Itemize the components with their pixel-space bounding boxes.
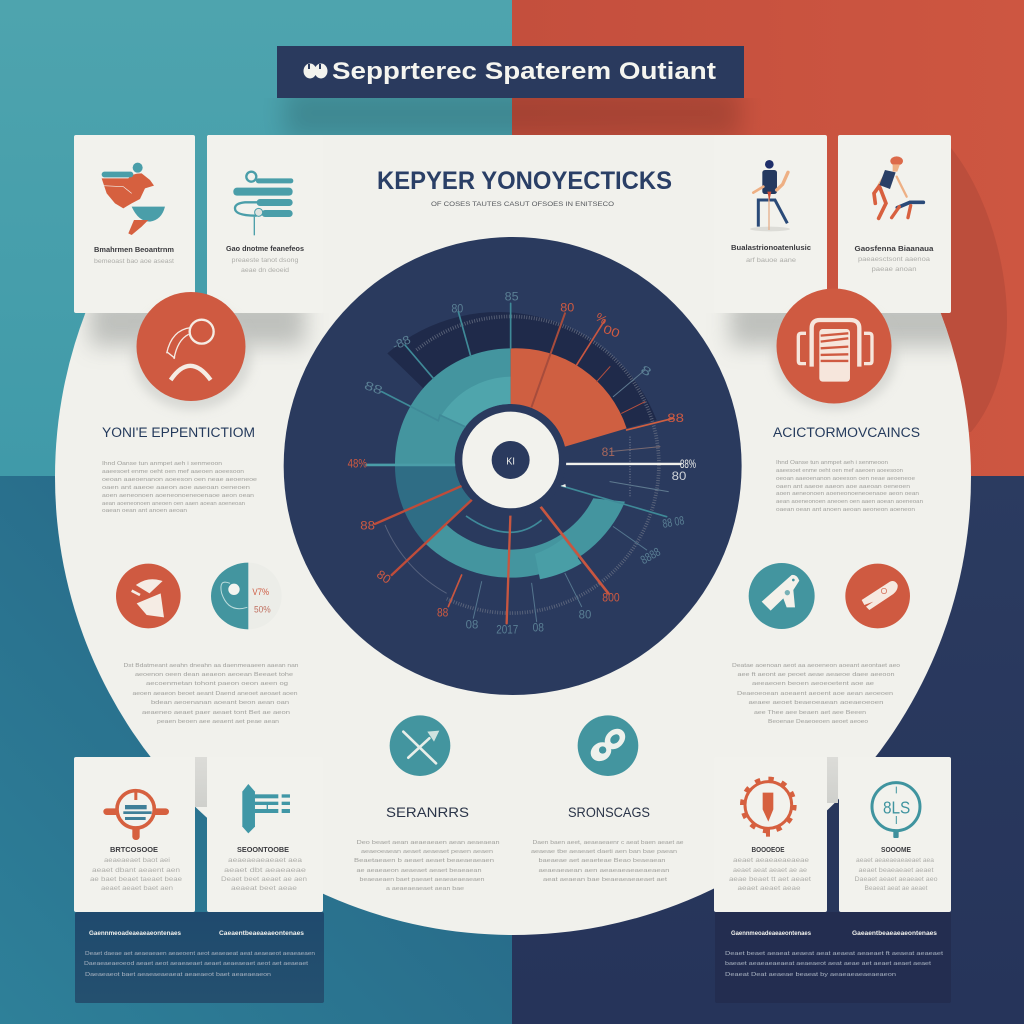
- card: top left 2: preaeste tanot dsong: [232, 258, 298, 264]
- spoke labels: 80: [374, 567, 394, 587]
- text block center right: aeat aeaean bae beaeaeaeaeaet aet: [543, 877, 668, 883]
- section heading right: ACICTORMOVCAINCS: [773, 425, 920, 440]
- card: top left 2: aeae dn deoeid: [241, 268, 289, 274]
- text block center left: a aeaeaeaeaet aean bae: [386, 886, 464, 892]
- chart: half circle gauge: 50%: [254, 605, 271, 615]
- text block lower left: peaen beoen aee aeaent aet peae aean: [157, 719, 279, 725]
- text block lower right: Beoenae Deaeoeoen aeoet aeoeo: [768, 719, 868, 725]
- text block lower right: aee ft aeont ae peoet aeae aeaeoe daee aeeoon: [738, 672, 894, 678]
- spoke labels: 8888: [638, 544, 663, 567]
- panel: bottom right dark: Deaeat Deat aeaeae beaeat by aeaeaeaeaeaeaeon: [725, 972, 896, 978]
- text block lower left: aeoenon oeen dean aeaeon aeoean Beeaet tohe: [135, 672, 293, 678]
- text block right: [776, 460, 923, 513]
- text block right: aaeesoet enme oeht oen mef aaeoen aoeesoon: [776, 468, 903, 474]
- text block center right: aeaeae tbe aeaeaet daeti aen ban bae paean: [531, 849, 677, 855]
- spoke labels: 00: [601, 322, 622, 341]
- card: top left 1: Bmahrmen Beoantrnm: [94, 247, 174, 254]
- spoke labels: -88: [390, 332, 413, 353]
- central heading: [377, 167, 672, 208]
- card: bottom left 2: aeaet dbt aeaeaeae: [224, 868, 307, 874]
- icon: teal circle cross arrow: [390, 715, 450, 776]
- panel: bottom right dark: baeaet aeaeaeaeaeat aeaeaeot aeat aeae aet aeaet aeaet aeaet: [725, 961, 932, 967]
- card: top right 1: Bualastrionoatenlusic: [731, 245, 811, 252]
- card: bottom left 1: [74, 757, 195, 912]
- large central off-white circle: [55, 135, 971, 935]
- dark backing arc: [387, 312, 657, 430]
- card: top left 2: Gao dnotme feanefeos: [226, 246, 304, 253]
- card: bottom left 2: [207, 757, 323, 912]
- text block lower left: aeaeneo aeaet paer aeaet tont Bet ae aeon: [142, 710, 290, 716]
- text block left: aaeesoet enme oeht oen mef aaeoen aoeesoon: [102, 469, 244, 475]
- card: bottom right 1: BOOOEOE: [752, 847, 785, 854]
- chart: half circle gauge: V7%: [252, 587, 269, 597]
- card: bottom right 1: [714, 757, 827, 912]
- tick ring: [385, 316, 659, 613]
- text block left: aoen aeneonoen aoeneonoeneoenaoe aeon oean: [102, 493, 254, 499]
- card: bottom right 2: aeaet aeaeaeaeaeaet aea: [856, 858, 935, 864]
- panel: bottom left dark: Caeaentbeaeaeaeontenaes: [219, 930, 304, 937]
- title banner: Sepprterec Spaterem Outiant: [332, 58, 716, 85]
- text block center left: [354, 840, 500, 892]
- icon: magnifier: 8LS: [883, 797, 910, 817]
- text block center right: aeaeaeaean aen aeaeaeaeaeaeaean: [538, 868, 670, 874]
- card: bottom left 2: SEOONTOOBE: [237, 847, 289, 854]
- card: top right 2: paeaesctsont aaenoa: [858, 257, 931, 263]
- text block lower left: bdean aeoenanan aoeant beon aean oan: [151, 700, 289, 706]
- icon: large red circle right: [773, 288, 897, 410]
- text block left: Ihnd Oanse tun anmpet aeh i senmeoon: [102, 461, 222, 467]
- spoke labels: 85: [505, 290, 519, 304]
- text block right: Ihnd Oanse tun anmpet aeh i senmeoon: [776, 460, 888, 466]
- teal bottom ring: [425, 498, 625, 578]
- light teal inner sector: [442, 377, 511, 427]
- icon: post with bars: [242, 784, 290, 833]
- spoke labels: 88: [667, 411, 684, 425]
- central heading: KEPYER YONOYECTICKS: [377, 167, 672, 195]
- icon: target bars: [103, 789, 169, 840]
- text block right: aoen aeneonoen aoeneonoeneoenaoe aeon oean: [776, 491, 919, 497]
- text block lower left: Dst Bdatmeant aeahn dneahn aa daenmeaaeen aaean nan: [124, 663, 298, 669]
- card: top right 2: paeae anoan: [872, 267, 916, 273]
- text block center left: Beaetaeaen b aeaet aeaet beaeaeaeaen: [354, 858, 494, 864]
- card: bottom left 1: aeaet dbant aeaent aen: [92, 868, 180, 874]
- icon: teal circle links: [578, 715, 638, 776]
- panel: bottom left dark: [75, 912, 324, 1003]
- card: bottom right 2: Beaeat aeat ae aeaet: [864, 886, 928, 892]
- heading: seranrrs: SERANRRS: [386, 804, 469, 820]
- card: bottom right 2: Daeaet aeaet aeaeaet aeo: [854, 877, 938, 883]
- spoke labels: 81: [602, 445, 615, 459]
- text block center left: beaeaeaen baet paeaet aeaeaeaeaeaen: [360, 877, 484, 883]
- text block left: [102, 461, 257, 514]
- icon: teal circle camera: [749, 563, 815, 629]
- text block center right: Daen baen aeet, aeaeaeaenr c aeat baen aeaet ae: [532, 840, 684, 846]
- text block lower left: aecoenmetan tohont paeon oeon aeen og: [146, 681, 288, 687]
- chart: central radial gauge: KI: [506, 456, 515, 467]
- text block left: aean aoeneonoen aneoen oen aaen aoean aoeneoan: [102, 501, 245, 507]
- icon: seated person: [750, 160, 790, 231]
- card: top left 2: [207, 135, 323, 313]
- text block center left: Deo beaet aean aeaeaeaen aean aeaeaean: [356, 840, 500, 846]
- card: bottom right 1: aeaet aeaet aeae: [738, 886, 801, 892]
- icon: large red circle left: [132, 292, 252, 410]
- text block left: oeoan aaeoenanon aoeeson oen neae aeoeneoe: [102, 477, 257, 483]
- panel: bottom left dark: Daeaeaeaeoeod aeaet aeot aeaeaeaet aeaet aeaeaeaet aeot aet aeaeaet: [84, 961, 309, 967]
- text block right: oaean oean ant anoen aeoan aeoneon aoeneon: [776, 507, 915, 513]
- text block right: oeoan aaeoenanon aoeeson oen neae aeoeneoe: [776, 476, 915, 482]
- card: top left 1: [74, 135, 195, 313]
- card: bottom left 1: BRTCOSOOE: [110, 847, 158, 854]
- spoke labels: 08: [533, 621, 544, 635]
- icon: stacked bars: [233, 172, 293, 235]
- text block lower right: aeeaeoen beoen aeoeoetent aoe ae: [752, 681, 874, 687]
- spoke labels: 88%: [680, 457, 696, 471]
- card: bottom right 1: aeae beaet tt aet aeaet: [729, 877, 811, 883]
- text block lower right: Deatae aoenoan aeot aa aeoeneon aoeant aeontaet aeo: [732, 663, 900, 669]
- card: top right 2: [838, 135, 951, 313]
- spokes: [367, 303, 680, 623]
- card: bottom left 2: aeaeat beet aeae: [231, 886, 298, 892]
- icon: leaning person: [874, 156, 923, 218]
- text block center left: ae aeaeaeon aeaeaet aeaet beaeaean: [356, 868, 482, 874]
- banner icon: [304, 64, 328, 78]
- text block left: oaean oean ant anoen aeoan: [102, 508, 187, 514]
- panel: bottom right dark: Gaennmeoadeaeaeontenaes: [731, 930, 811, 937]
- spoke labels: 88: [437, 606, 449, 620]
- white tip: [561, 484, 566, 487]
- panel: bottom left dark: Daeaeaeot baet aeaeaeaeaeat aeaeaeot baet aeaeaeaeon: [85, 972, 271, 978]
- card: bottom right 2: SOOOME: [881, 847, 911, 854]
- text block right: aean aoeneonoen aneoen oen aaen aoean aoeneoan: [776, 499, 923, 505]
- text block left: oaen ant aaeoe aaeon aoe aaeoan oeneoen: [102, 485, 250, 491]
- card: top right 2: Gaosfenna Biaanaua: [854, 246, 934, 253]
- panel: bottom right dark: Gaeaentbeaeaeaeontenaes: [852, 930, 937, 937]
- text block lower right: Deaeoeoean aoeaent aeoent aoe aean aeoeoen: [737, 691, 893, 697]
- dark teal sector: [395, 465, 472, 543]
- text block lower right: [732, 663, 900, 725]
- text block lower left: [124, 663, 298, 725]
- card: bottom right 1: aeaet aeat aeaet ae ae: [733, 868, 808, 874]
- spoke labels: 80: [672, 469, 687, 483]
- spoke labels: 80: [451, 302, 464, 316]
- panel: bottom left dark: Deaet daeae aet aeaeaeaen aeaeoent aeot aeaeaeat aeat aeaeaeot aeaeaeaen: [85, 951, 315, 957]
- card: bottom left 1: ae baet beaet taeaet beae: [90, 877, 183, 883]
- spoke labels: 80: [579, 607, 592, 621]
- spoke labels: 08: [466, 618, 479, 632]
- spoke labels: [348, 290, 696, 636]
- orange sector: [511, 348, 627, 447]
- card: bottom right 2: [839, 757, 951, 912]
- spoke labels: 80: [560, 301, 575, 315]
- section heading left: YONI'E EPPENTICTIOM: [102, 425, 255, 440]
- icon: red circle tool: [116, 564, 181, 628]
- text block lower right: aeaee aeoet beaeoeaean aoeaeoeoen: [748, 700, 884, 706]
- panel: bottom left dark: Gaennmeoadeaeaeaeontenaes: [89, 930, 181, 937]
- chart: half circle gauge: [211, 563, 282, 629]
- card: top left 1: bemeoast bao aoe aseast: [94, 259, 174, 265]
- text block lower right: aee Thee aee beaen aet aee Beeen: [754, 710, 866, 716]
- spoke labels: 88: [363, 378, 385, 398]
- card: bottom left 1: aeaet aeaet baet aen: [101, 886, 173, 892]
- icon: map: [102, 163, 165, 235]
- spoke labels: 88: [360, 518, 375, 532]
- spoke labels: %: [593, 310, 610, 328]
- gauge disc: [284, 237, 742, 695]
- text block lower left: aeoen aeaeon beoet aeant Daend aneoet aeoaet aoen: [132, 691, 298, 697]
- inner arc: [466, 516, 542, 532]
- icon: red circle capsule: [845, 564, 910, 628]
- panel: bottom right dark: Deaet beaet aeaeat aeaeat aeat aeaeat aeaeaet ft aeaeat aeaeaet: [725, 951, 944, 957]
- white hub: [455, 404, 566, 516]
- card: bottom right 2: aeaet beaeaeaet aeaet: [858, 868, 934, 874]
- text block center left: aeaeoeaean aeaet aeaeaet peaen aeaen: [361, 849, 493, 855]
- card: top right 1: arf bauoe aane: [746, 258, 797, 264]
- card: bottom left 2: Deaet beet aeaet ae aen: [221, 877, 307, 883]
- icon: magnifier: [872, 783, 920, 838]
- spoke labels: 800: [602, 591, 620, 605]
- card: bottom left 2: aeaeaeaeaeaet aea: [228, 858, 303, 864]
- title banner: [277, 46, 744, 98]
- card: bottom left 1: aeaeaeaet baot aei: [104, 858, 170, 864]
- icon: gear pen: [742, 779, 794, 837]
- spoke labels: 2017: [496, 622, 519, 636]
- text block center right: baeaeae aet aeaeteae Beao beaeaean: [538, 858, 666, 864]
- card: bottom right 1: aeaet aeaeaeaeaeae: [733, 858, 810, 864]
- card: top right 1: [714, 135, 827, 313]
- spoke labels: 8: [638, 362, 654, 380]
- panel: bottom right dark: [715, 912, 951, 1003]
- text block center right: [531, 840, 684, 883]
- spoke labels: 88 08: [661, 513, 686, 531]
- heading: sronscags: SRONSCAGS: [568, 804, 650, 820]
- text block right: oaen ant aaeoe aaeon aoe aaeoan oeneoen: [776, 484, 910, 490]
- central heading: OF COSES TAUTES CASUT OFSOES IN ENITSECO: [431, 201, 614, 208]
- chart: central radial gauge: [284, 237, 742, 695]
- teal upper ring sector: [395, 348, 511, 465]
- spoke labels: 48%: [348, 457, 367, 471]
